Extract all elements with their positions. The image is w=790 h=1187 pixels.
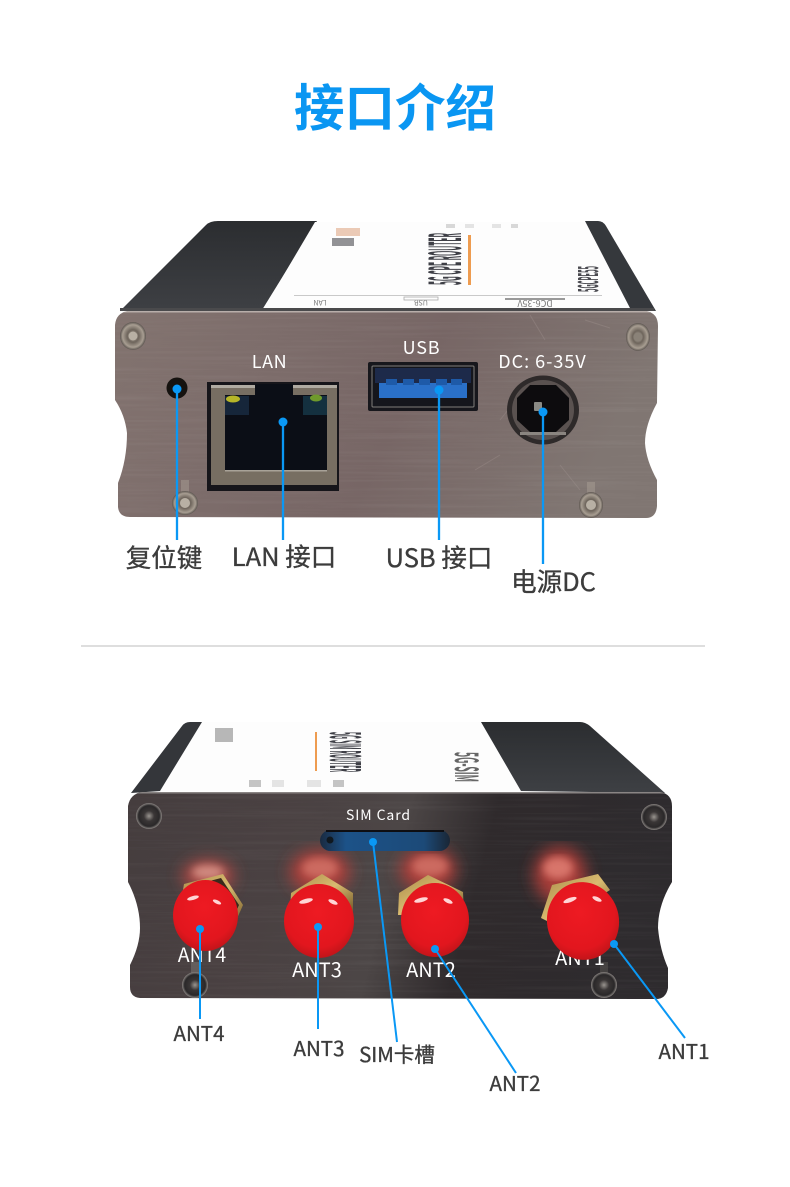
callout: power DC: 电源DC [511,562,596,599]
callout: reset button: 复位键 [126,538,202,575]
housing top: dark side [120,221,317,311]
housing top: white label [160,722,521,791]
screw [641,804,667,830]
screw [579,482,603,518]
divider [81,645,705,647]
screw [626,323,650,351]
housing top: white label: DC6-35V [517,297,553,310]
callout: reset button [126,384,202,575]
antenna connector 3 [284,874,354,958]
callout: ANT1: ANT1 [659,1035,709,1065]
housing top: dark side [481,722,665,793]
device photo: front panel with ports [110,221,665,525]
device photo: rear panel with antennas: 5G SIM ROUTER [317,732,378,772]
callout: USB port [386,386,492,575]
device photo: rear panel with antennas: 5G-SIM [445,752,491,782]
housing top: right edge [585,221,656,311]
screw [172,480,198,515]
callout: LAN port [232,418,336,574]
panel label: LAN: LAN [252,348,287,374]
screw [136,803,162,829]
housing top: left edge [131,722,203,793]
reset hole [166,378,188,398]
panel label: ANT2: ANT2 [406,954,456,983]
callout: ANT1 [610,940,709,1065]
callout: SIM card slot: SIM卡槽 [359,1038,435,1068]
callout: ANT2: ANT2 [490,1067,540,1097]
callout: LAN port: LAN 接口 [232,537,336,574]
callout: ANT2 [431,945,540,1097]
DC power jack [507,376,579,444]
USB port [368,362,478,411]
housing top: white label: LAN [313,297,327,307]
callout: SIM card slot [359,838,435,1068]
panel label: USB: USB [403,334,440,360]
metal faceplate [120,788,680,1003]
antenna connector 1 [541,874,625,966]
housing top: white label: USB [414,297,428,307]
red glow above antennas [182,847,586,903]
screw [120,322,146,350]
callout: ANT4: ANT4 [174,1017,224,1047]
panel label: ANT1: ANT1 [555,942,605,971]
LAN port [207,382,339,491]
antenna connector 4 [173,874,243,951]
screw [182,962,208,998]
metal faceplate [110,305,665,525]
callout: ANT4 [174,925,224,1047]
callout: ANT3 [294,923,344,1062]
callout: ANT3: ANT3 [294,1032,344,1062]
panel label: ANT3: ANT3 [292,954,342,983]
panel label: DC: DC: 6-35V [498,348,587,374]
SIM card slot [320,830,450,851]
device photo: rear panel with antennas [120,722,680,1003]
title: 接口介绍 [294,67,496,141]
housing top: white label: 5GCPE55 [567,266,606,292]
housing top: white label [263,222,631,310]
antenna connector 2 [398,875,469,957]
callout: power DC [511,408,596,599]
panel label: SIM Card: SIM Card [346,805,411,825]
panel label: ANT4: ANT4 [178,939,226,968]
callout: USB port: USB 接口 [386,538,492,575]
screw [591,962,617,998]
